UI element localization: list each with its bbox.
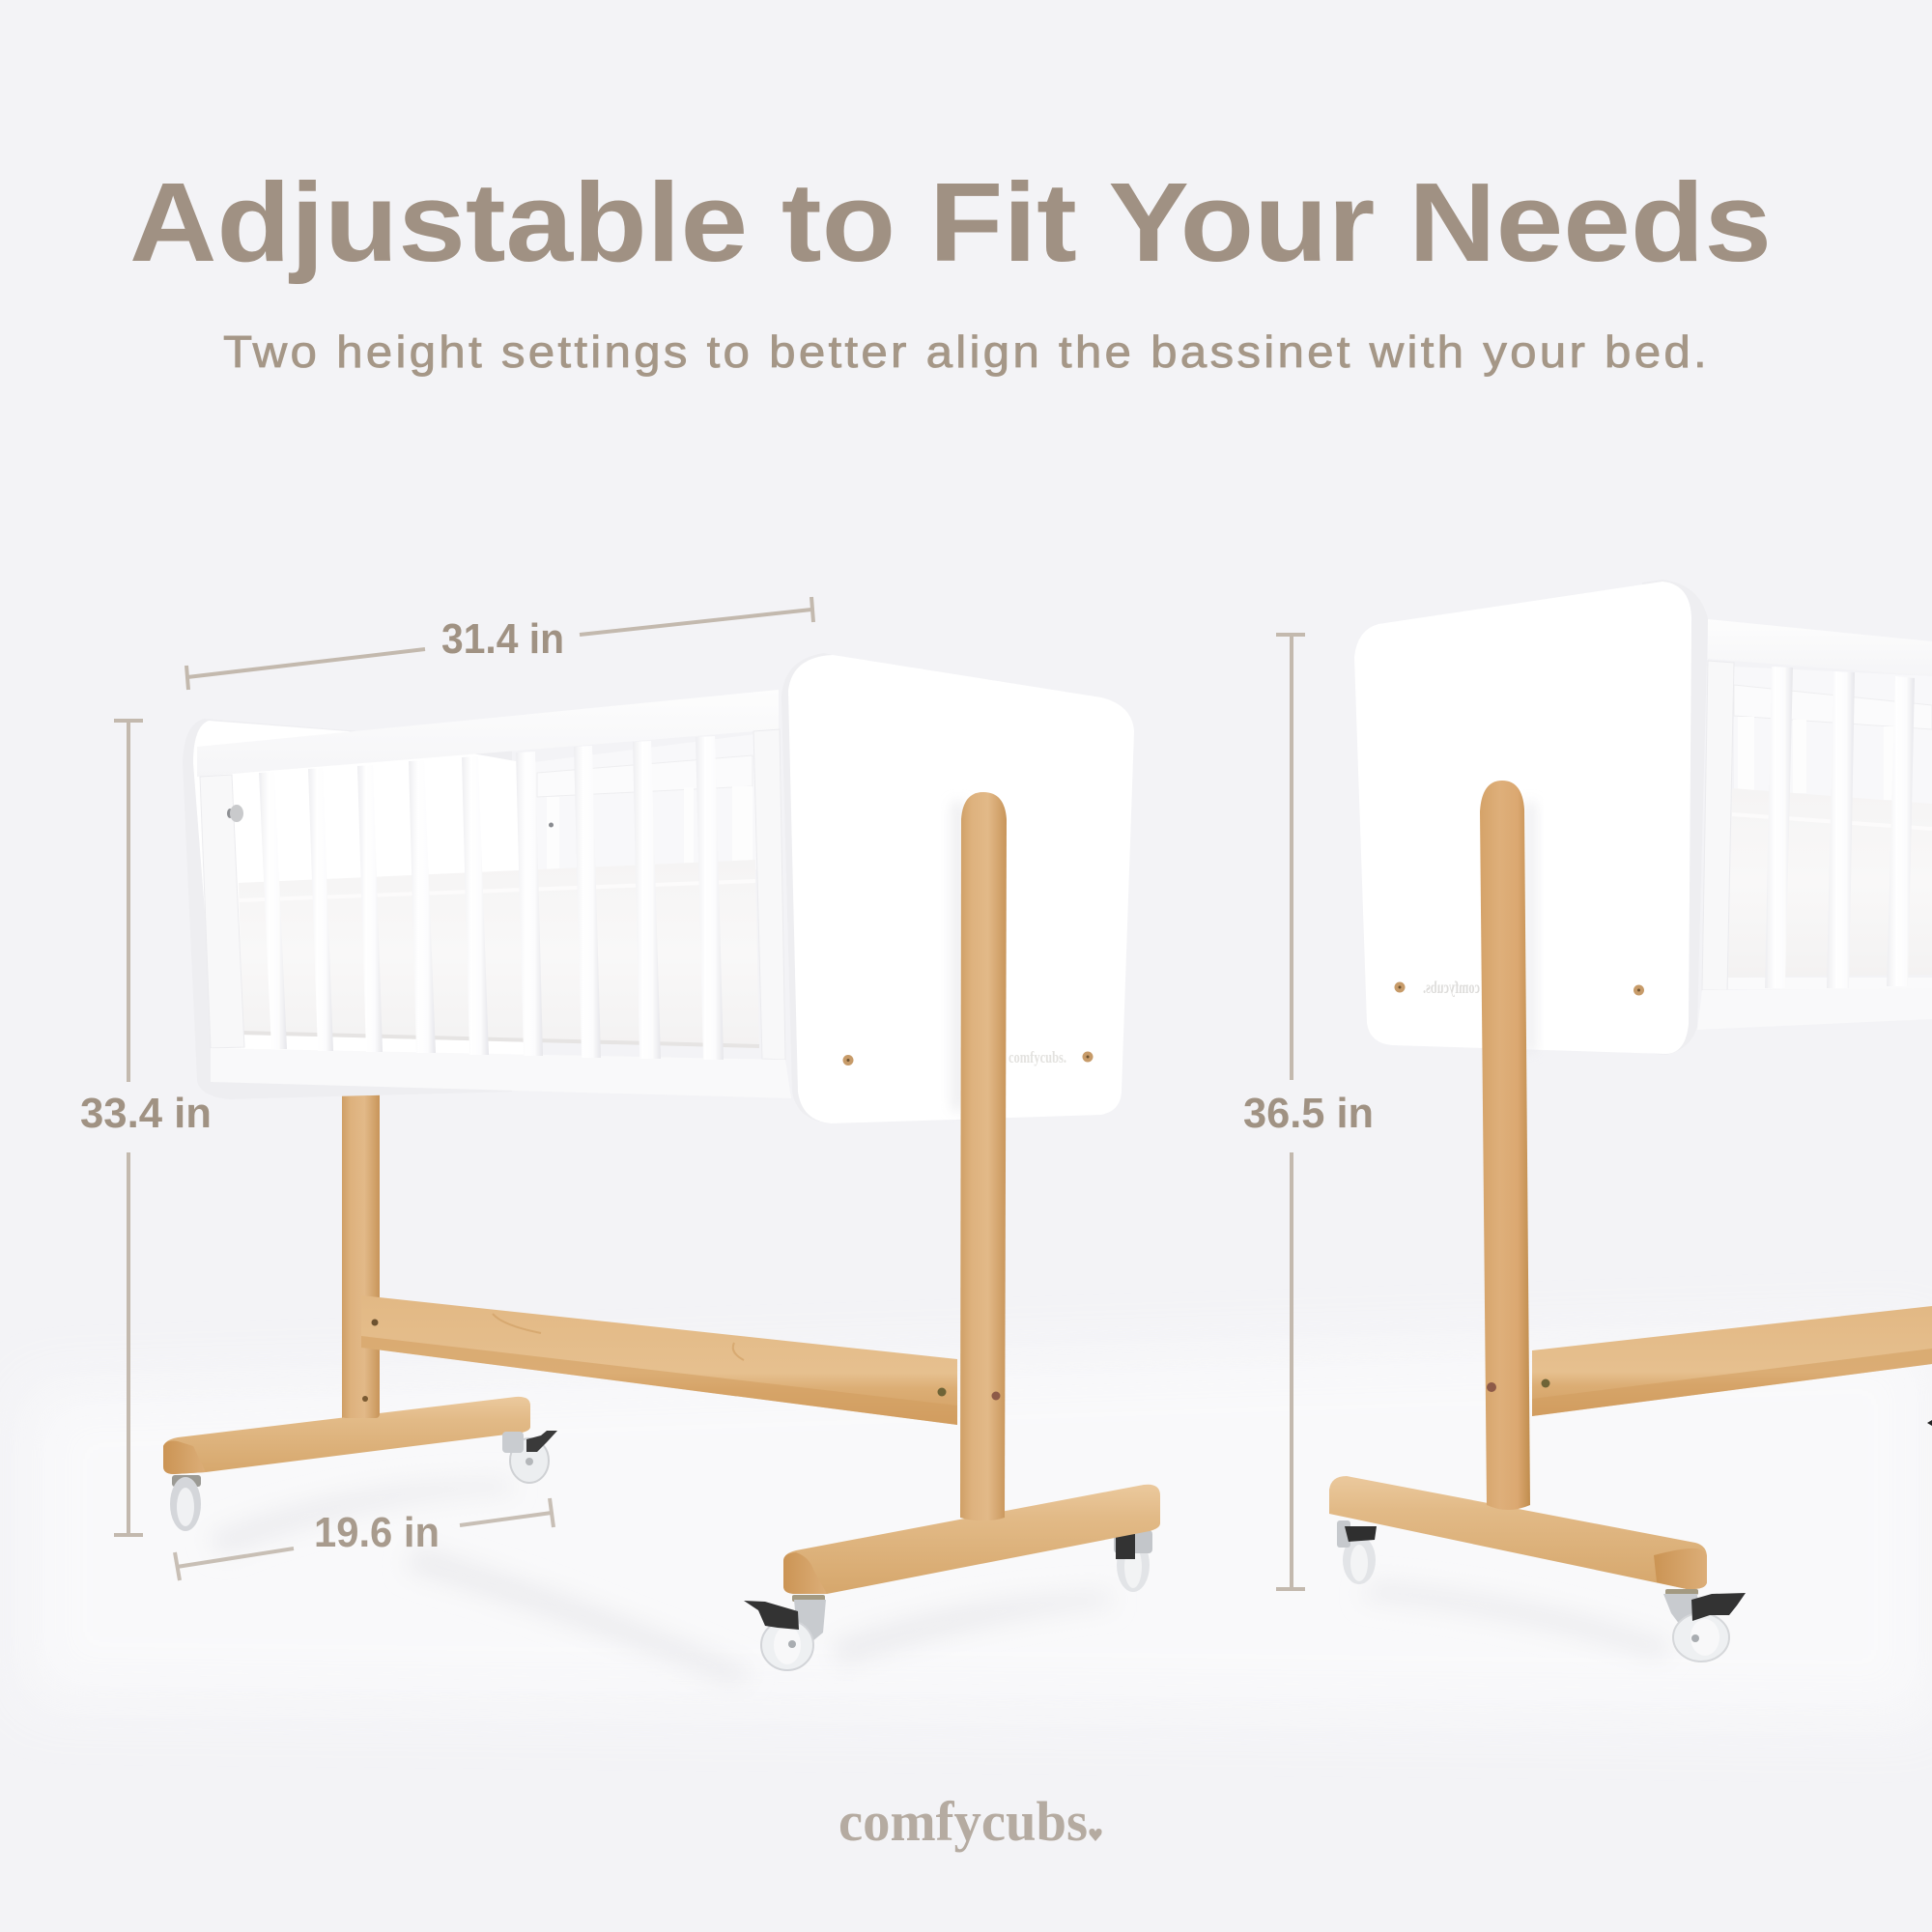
floor shadows bbox=[1362, 1582, 1671, 1660]
front post bbox=[960, 792, 1007, 1520]
end panel edge bbox=[1642, 580, 1708, 1055]
dimension: depth 19.6 in: 19.6 in bbox=[314, 1509, 440, 1556]
back post bbox=[342, 1094, 380, 1418]
bottom rail bbox=[211, 1048, 791, 1098]
crossbeam bbox=[1532, 1306, 1932, 1416]
mirrored panel brand mark: comfycubs. bbox=[1423, 978, 1480, 997]
bolt left bbox=[842, 1055, 854, 1065]
caster: front far bbox=[1114, 1530, 1152, 1592]
title: Adjustable to Fit Your Needs bbox=[129, 159, 1772, 285]
far side slats bbox=[547, 786, 753, 874]
lower shelf bbox=[1728, 978, 1932, 989]
foot bbox=[1329, 1476, 1707, 1589]
left frame post bbox=[200, 775, 244, 1048]
mattress bbox=[239, 860, 759, 1048]
post shadow bbox=[1524, 802, 1536, 1053]
far side back rail bbox=[537, 755, 753, 797]
mattress bbox=[1728, 788, 1932, 978]
far side back rail bbox=[1734, 685, 1932, 729]
screw far bbox=[549, 823, 554, 827]
frame post bbox=[1702, 661, 1734, 990]
top rail bbox=[197, 690, 779, 777]
edge mark bbox=[1927, 1420, 1932, 1426]
bassinet basket bbox=[183, 653, 1134, 1123]
far end panel bbox=[183, 719, 512, 1099]
caster: left bbox=[1337, 1520, 1377, 1584]
bassinet basket bbox=[1354, 580, 1932, 1055]
floor glow bbox=[29, 1333, 1932, 1719]
end panel face bbox=[1354, 582, 1691, 1054]
caster: back right bbox=[502, 1431, 557, 1483]
knob bbox=[227, 805, 243, 822]
dimension: height 36.5 in: 36.5 in bbox=[1243, 1090, 1374, 1137]
caster: back left bbox=[170, 1475, 201, 1531]
top rail bbox=[1708, 619, 1932, 676]
bolt left bbox=[1395, 981, 1405, 993]
brand logo: comfycubs bbox=[838, 1790, 1088, 1853]
caster: right bbox=[1663, 1589, 1746, 1662]
inner backing bbox=[526, 734, 759, 884]
back foot bbox=[163, 1391, 530, 1474]
slats bbox=[1765, 667, 1915, 988]
dimension: depth 19.6 in bbox=[175, 1498, 554, 1580]
front foot bbox=[783, 1485, 1160, 1594]
bolt right bbox=[1634, 985, 1644, 995]
inner white backing bbox=[1734, 667, 1932, 811]
floor shadows bbox=[208, 1480, 1111, 1686]
front post shadow bbox=[951, 802, 966, 1111]
caster: front near bbox=[744, 1595, 826, 1670]
near end panel face bbox=[788, 655, 1134, 1123]
bolt right bbox=[1082, 1051, 1094, 1063]
panel: right bassinet, higher position bbox=[1329, 580, 1932, 1662]
dimension: width 31.4 in bbox=[186, 597, 813, 690]
slats bbox=[259, 736, 724, 1060]
dimension: height 33.4 in: 33.4 in bbox=[80, 1090, 212, 1137]
icon: heart bbox=[1089, 1829, 1102, 1841]
dimension: width 31.4 in: 31.4 in bbox=[441, 615, 564, 663]
near end panel edge bbox=[781, 653, 840, 1123]
crossbeam bbox=[361, 1295, 957, 1425]
subtitle: Two height settings to better align the bassinet with your bed. bbox=[223, 327, 1710, 377]
panel: left bassinet, lower position bbox=[163, 653, 1160, 1686]
bottom rail bbox=[1697, 988, 1932, 1030]
right frame post bbox=[753, 729, 785, 1060]
far side slats bbox=[1738, 717, 1895, 800]
far panel inner face bbox=[193, 721, 533, 1072]
panel brand mark: comfycubs. bbox=[1009, 1048, 1066, 1066]
post bbox=[1480, 781, 1530, 1510]
